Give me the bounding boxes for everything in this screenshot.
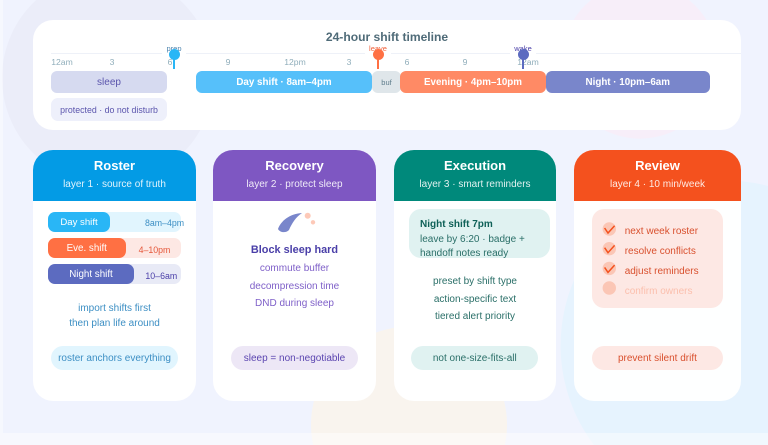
evening shift row: 4–10pm (139, 245, 170, 255)
note: protected (51, 98, 167, 121)
evening shift row: Eve. shift (67, 243, 107, 254)
bar: evening (400, 71, 546, 93)
hour labels: 12am (517, 57, 539, 67)
bar: buffer (372, 71, 401, 93)
recovery pill: sleep = non-negotiable (244, 353, 345, 364)
roster header (33, 150, 196, 201)
recovery list: decompression time (250, 280, 339, 292)
review header (574, 150, 741, 201)
bar: sleep: sleep (97, 77, 121, 88)
marker: wake: wake (514, 44, 532, 53)
day shift row (48, 212, 184, 232)
execution header: Execution (444, 158, 506, 173)
execution list: tiered alert priority (435, 311, 515, 322)
night shift row: Night shift (69, 269, 113, 280)
review pill (592, 346, 723, 370)
panel: roster (33, 150, 196, 401)
hour labels: 9 (226, 57, 230, 67)
reminder card: Night shift 7pm (420, 219, 493, 230)
recovery header: layer 2 · protect sleep (246, 179, 343, 190)
execution list: action-specific text (434, 294, 516, 304)
hour labels: 6 (405, 57, 409, 67)
hour labels: 12am (51, 57, 73, 67)
review header: Review (635, 158, 680, 173)
recovery pill (231, 346, 358, 370)
roster note: import shifts first (78, 302, 151, 314)
marker: leave: leave (369, 44, 387, 53)
reminder card: leave by 6:20 · badge + (420, 234, 525, 245)
recovery header: Recovery (265, 158, 324, 173)
hour labels: 12pm (284, 57, 306, 67)
checklist: resolve conflicts (625, 246, 696, 257)
execution pill (411, 346, 538, 370)
heading: timeline title: 24-hour shift timeline (326, 30, 448, 44)
day shift row: Day shift (60, 216, 98, 228)
checklist: next week roster (625, 226, 698, 237)
bar: day shift: Day shift · 8am–4pm (236, 77, 332, 88)
evening shift row (48, 238, 181, 258)
checklist: adjust reminders (625, 266, 699, 277)
recovery heading: Block sleep hard (251, 244, 338, 256)
hour labels: 6 (168, 57, 172, 67)
recovery list: DND during sleep (255, 298, 334, 309)
recovery header (213, 150, 376, 201)
hour labels: 3 (347, 57, 351, 67)
execution list: preset by shift type (433, 276, 517, 287)
icons: checks (602, 222, 616, 295)
review header: layer 4 · 10 min/week (610, 179, 705, 190)
roster note: then plan life around (69, 318, 160, 328)
hour labels: 3 (110, 57, 114, 67)
reminder card (409, 209, 550, 258)
recovery list (250, 263, 339, 309)
checklist (592, 209, 723, 308)
recovery list: commute buffer (260, 263, 329, 274)
marker: prep: prep (166, 44, 182, 53)
roster header: Roster (94, 158, 135, 173)
roster pill: roster anchors everything (58, 353, 171, 364)
bar: buffer: buf (381, 78, 392, 87)
day shift row: 8am–4pm (145, 218, 184, 228)
reminder card: handoff notes ready (420, 248, 508, 259)
hour labels: 9 (463, 57, 467, 67)
roster pill (51, 346, 178, 370)
icon: moon and dots (278, 212, 316, 232)
panel: review (574, 150, 741, 401)
panel: recovery (213, 150, 376, 401)
hour labels (51, 57, 539, 67)
checklist: confirm owners (625, 286, 692, 297)
night shift row: 10–6am (145, 271, 177, 281)
execution list (433, 276, 517, 322)
bar: day shift (196, 71, 372, 93)
bar: night: Night · 10pm–6am (586, 77, 670, 88)
execution header: layer 3 · smart reminders (419, 179, 531, 190)
marker: leave (369, 44, 387, 69)
note: protected: protected · do not disturb (60, 105, 158, 115)
panel: execution (394, 150, 556, 401)
execution header (394, 150, 556, 201)
axis line (51, 53, 741, 54)
review pill: prevent silent drift (618, 353, 697, 364)
bar: evening: Evening · 4pm–10pm (424, 77, 522, 88)
roster header: layer 1 · source of truth (63, 179, 166, 190)
execution pill: not one-size-fits-all (433, 353, 517, 364)
panel: 24-hour shift timeline (33, 20, 741, 130)
roster note (69, 302, 160, 328)
bar: night (546, 71, 710, 93)
night shift row (48, 264, 181, 284)
bar: sleep (51, 71, 167, 93)
marker: wake (514, 44, 532, 69)
marker: prep (166, 44, 182, 69)
